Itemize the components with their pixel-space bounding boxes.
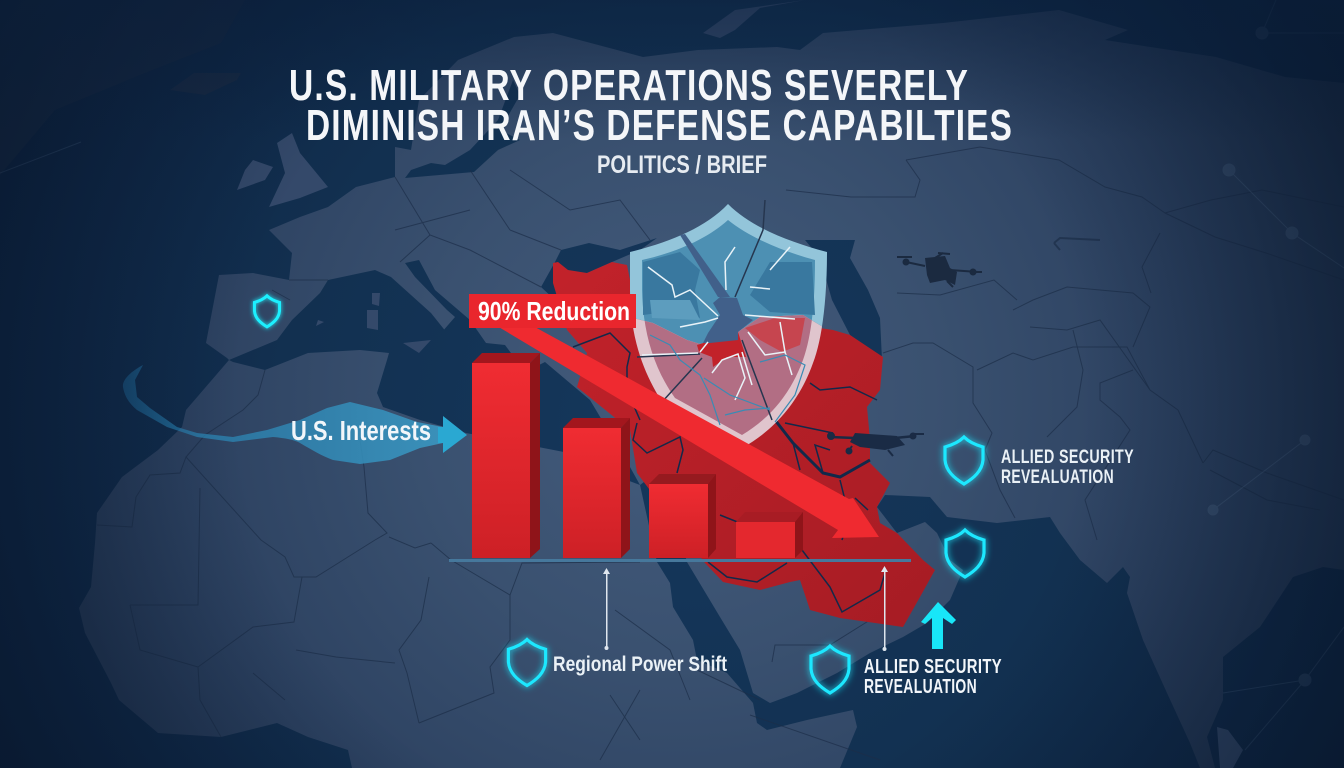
downward trend arrow: [497, 326, 879, 538]
drone: upper right: [897, 253, 982, 287]
title: DIMINISH IRAN’S DEFENSE CAPABILTIES: [306, 101, 1013, 150]
Black sea: [541, 238, 657, 300]
shield upper half, blue glass: [630, 204, 827, 344]
exposed red core: [697, 332, 746, 367]
Mediterranean sea: [229, 260, 640, 485]
shield icon: Oman coast: [946, 530, 984, 577]
Bay of Bengal: [1207, 567, 1344, 768]
bar 3: [649, 474, 716, 558]
shield icon: Spain: [254, 296, 280, 327]
cyan up arrow: [921, 602, 956, 649]
Baltic sea: [405, 80, 520, 178]
bar 2: [563, 418, 630, 558]
Red Sea, Gulf of Aden, Arabian Sea: [640, 470, 1200, 768]
title: [289, 61, 1013, 150]
label: allied security revaluation, lower: ALLIED SECURITY: [864, 656, 1002, 678]
title: U.S. MILITARY OPERATIONS SEVERELY: [289, 61, 969, 110]
U.S. interests label: U.S. Interests: [291, 415, 431, 446]
label: allied security revaluation, lower: [864, 656, 1002, 698]
blue vein lines: [650, 335, 805, 425]
label: allied security revaluation, right: REVEALUATION: [1001, 466, 1114, 488]
drone: over Iran: [828, 432, 924, 456]
shield lower half, pink glass: [633, 315, 822, 444]
bar 4: [736, 512, 803, 558]
label: 90% reduction: 90% Reduction: [478, 296, 630, 326]
label: allied security revaluation, lower: REVEALUATION: [864, 676, 977, 698]
shield icon: regional power shift: [508, 639, 546, 686]
pointer line: regional power shift: [603, 568, 610, 650]
bar 1: [472, 353, 540, 558]
highlighted map of Iran: [553, 262, 935, 627]
islands: [237, 0, 1243, 768]
dark cracks: [680, 234, 730, 297]
shield icon: lower allied security: [811, 646, 849, 693]
broken glass shield: [630, 200, 827, 448]
shield icon: right upper: [945, 437, 983, 484]
central crater: [703, 297, 753, 343]
label: regional power shift: Regional Power Shift: [553, 653, 727, 676]
label: allied security revaluation, right: ALLIED SECURITY: [1001, 446, 1134, 468]
bar chart: [449, 353, 911, 562]
pointer line: allied security: [881, 566, 888, 651]
label: allied security revaluation, right: [1001, 446, 1134, 488]
chart baseline: [449, 559, 911, 562]
subtitle: POLITICS / BRIEF: [597, 151, 767, 179]
flow arrow: U.S. interests: [123, 365, 467, 464]
faint country borders: [97, 147, 1344, 760]
Caspian sea: [805, 240, 882, 360]
white cracks: [642, 247, 795, 400]
